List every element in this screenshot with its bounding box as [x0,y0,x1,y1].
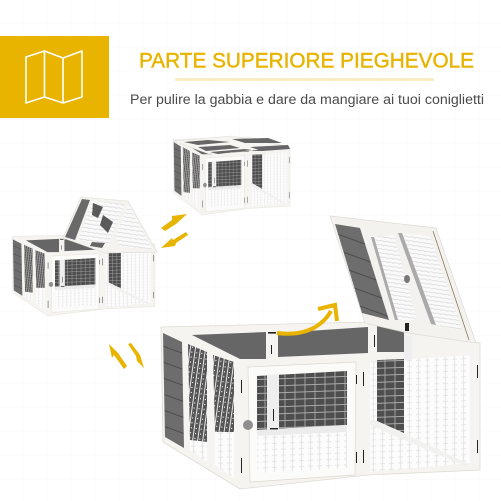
open lid [330,216,476,343]
arrow: down-left between hutches [161,232,188,248]
title: PARTE SUPERIORE PIEGHEVOLE [139,50,474,72]
arrow: down-right lower [128,343,144,368]
half-open hutch [12,197,157,316]
raised triangular lid [63,197,157,253]
icon panel: folding map [0,36,109,118]
closed hutch [173,136,290,215]
divider under title [175,78,434,81]
large hutch [161,216,480,489]
arrow: up-left lower [109,344,127,369]
curved arrow: opening lid [277,305,337,334]
arrow: up-right between hutches [161,214,187,231]
subtitle: Per pulire la gabbia e dare da mangiare ai tuoi coniglietti [130,92,484,107]
